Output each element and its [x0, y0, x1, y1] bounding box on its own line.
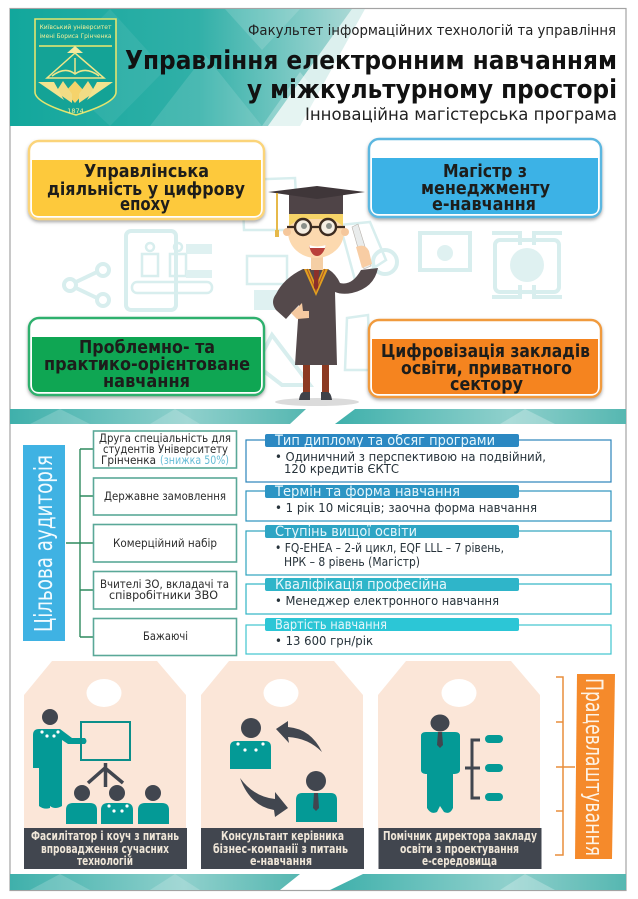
band: middle	[10, 409, 626, 424]
faculty line: Факультет інформаційних технологій та управління	[248, 23, 616, 39]
program box: term: Термін та форма навчання	[274, 484, 460, 500]
audience boxes	[94, 431, 236, 656]
audience text: (знижка 50%)	[160, 453, 229, 467]
card: orange: Цифровізація закладів	[381, 342, 590, 362]
university logo: імені Бориса Грінченка	[40, 33, 112, 40]
program box: degree: Ступінь вищої освіти	[275, 524, 417, 540]
audience text: Бажаючі	[143, 629, 188, 643]
graduate figure	[268, 186, 378, 406]
audience text	[99, 431, 231, 643]
program box: degree	[246, 524, 611, 575]
audience text: Державне замовлення	[104, 489, 226, 503]
tag: facilitator: технологій	[77, 853, 133, 868]
card: yellow: діяльність у цифрову	[47, 180, 246, 200]
program box: qualification	[246, 577, 611, 614]
program box: cost: • 13 600 грн/рік	[275, 633, 373, 648]
card: green: Проблемно- та	[79, 338, 215, 358]
audience text: Грінченка	[101, 453, 156, 467]
program box: qualification: Кваліфікація професійна	[275, 577, 447, 593]
card: orange	[369, 320, 601, 397]
program box: diploma: Тип диплому та обсяг програми	[274, 433, 495, 449]
card: blue: менеджменту	[421, 179, 551, 199]
tag: consultant: бізнес-компанії з питань	[213, 841, 348, 856]
card: yellow: Управлінська	[84, 162, 209, 182]
tag: assistant director: Помічник директора закладу	[383, 828, 537, 843]
tag: facilitator	[24, 661, 187, 869]
tag: facilitator: Фасилітатор і коуч з питань	[31, 828, 179, 843]
tag: consultant: Консультант керівника	[221, 828, 344, 843]
background icons	[64, 178, 562, 385]
program box: diploma: • Одиничний з перспективою на подвійний,	[275, 449, 546, 464]
header banner	[10, 9, 365, 126]
subtitle: Інноваційна магістерська програма	[305, 105, 617, 125]
card: green: практико-орієнтоване	[44, 355, 250, 375]
tag: facilitator: впровадження сучасних	[41, 841, 169, 856]
audience connector	[66, 449, 93, 637]
audience text: співробітники ЗВО	[109, 588, 218, 602]
side label: employment	[575, 674, 615, 859]
program box: degree: • FQ-EHEA – 2-й цикл, EQF LLL – 7 рівень,	[275, 540, 504, 555]
side label: target audience: Цільова аудиторія	[29, 455, 58, 632]
icon: presenter with audience	[33, 709, 169, 824]
icon: manager with hierarchy	[421, 714, 503, 813]
tag: assistant director: освіти з проектування	[400, 841, 519, 856]
card: blue: Магістр з	[443, 162, 527, 182]
icon: two people exchange	[230, 718, 337, 822]
audience text: Друга спеціальність для	[99, 431, 231, 445]
program box: cost: Вартість навчання	[275, 618, 387, 633]
card: blue: е-навчання	[432, 195, 536, 215]
tag: consultant: е-навчання	[250, 853, 312, 868]
title	[125, 46, 617, 105]
program box: cost	[246, 618, 611, 654]
tag: assistant director: е-середовища	[422, 853, 497, 868]
program box: degree: НРК – 8 рівень (Магістр)	[284, 554, 420, 569]
university logo: Київський університет	[40, 24, 112, 31]
card: blue	[369, 139, 601, 217]
program box: diploma: 120 кредитів ЄКТС	[284, 461, 399, 476]
university logo: 1874	[67, 107, 84, 115]
tag: assistant director	[378, 661, 542, 869]
card: yellow: епоху	[120, 195, 170, 215]
program box: diploma	[246, 433, 611, 482]
program box: term: • 1 рік 10 місяців; заочна форма навчання	[275, 500, 537, 515]
audience text: студентів Університету	[103, 442, 228, 456]
band: bottom	[10, 874, 626, 890]
card: orange: сектору	[450, 375, 524, 395]
program box: qualification: • Менеджер електронного навчання	[275, 593, 499, 608]
card: green: навчання	[103, 372, 190, 392]
university logo	[35, 19, 116, 115]
program box: term	[246, 484, 611, 521]
audience text: Комерційний набір	[113, 536, 217, 550]
card: orange: освіти, приватного	[401, 359, 572, 379]
card: yellow	[29, 141, 264, 219]
employment bracket	[555, 677, 575, 855]
card: green	[29, 318, 264, 395]
tag: consultant	[201, 661, 364, 869]
side label: target audience	[23, 445, 65, 641]
audience text: Вчителі ЗО, вкладачі та	[100, 577, 229, 591]
